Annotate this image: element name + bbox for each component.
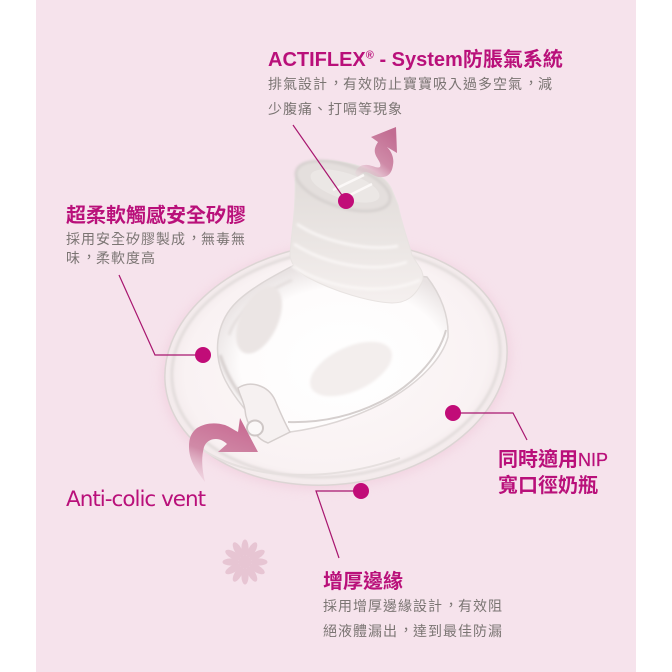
teat — [290, 151, 423, 303]
text: thick edge description — [323, 595, 503, 641]
callout: wide-neck compatibility: 同時適用NIP — [498, 449, 608, 471]
text: ACTIFLEX description: 排氣設計，有效防止寶寶吸入過多空氣，減 — [268, 73, 553, 94]
callout: ACTIFLEX system — [268, 48, 563, 119]
icon: air escaping arrow — [355, 127, 397, 177]
label: anti-colic vent: Anti-colic vent — [66, 487, 205, 512]
heading: ACTIFLEX: ACTIFLEX® - System防脹氣系統 — [268, 49, 563, 71]
icon: anti-colic vent arrow — [189, 418, 258, 482]
text: thick edge description: 絕液體漏出，達到最佳防漏 — [323, 620, 503, 641]
text: thick edge description: 採用增厚邊緣設計，有效阻 — [323, 595, 503, 616]
callout: wide-neck compatibility — [498, 448, 608, 497]
text: soft silicone description — [66, 228, 246, 268]
icon: daisy flower — [222, 540, 268, 584]
callout: wide-neck compatibility: 寬口徑奶瓶 — [498, 475, 598, 497]
text: ACTIFLEX description: 少腹痛、打嗝等現象 — [268, 99, 403, 119]
text: ACTIFLEX description — [268, 73, 553, 119]
flange — [147, 221, 525, 510]
heading: soft silicone: 超柔軟觸感安全矽膠 — [66, 205, 246, 227]
leader lines — [119, 125, 527, 558]
text: soft silicone description: 採用安全矽膠製成，無毒無 — [66, 228, 246, 249]
callout: thick edge — [323, 570, 503, 641]
text: soft silicone description: 味，柔軟度高 — [66, 247, 156, 268]
heading: thick edge: 增厚邊緣 — [323, 571, 403, 593]
callout: soft silicone — [66, 204, 246, 268]
marker dots — [195, 193, 461, 499]
dome — [217, 262, 448, 443]
